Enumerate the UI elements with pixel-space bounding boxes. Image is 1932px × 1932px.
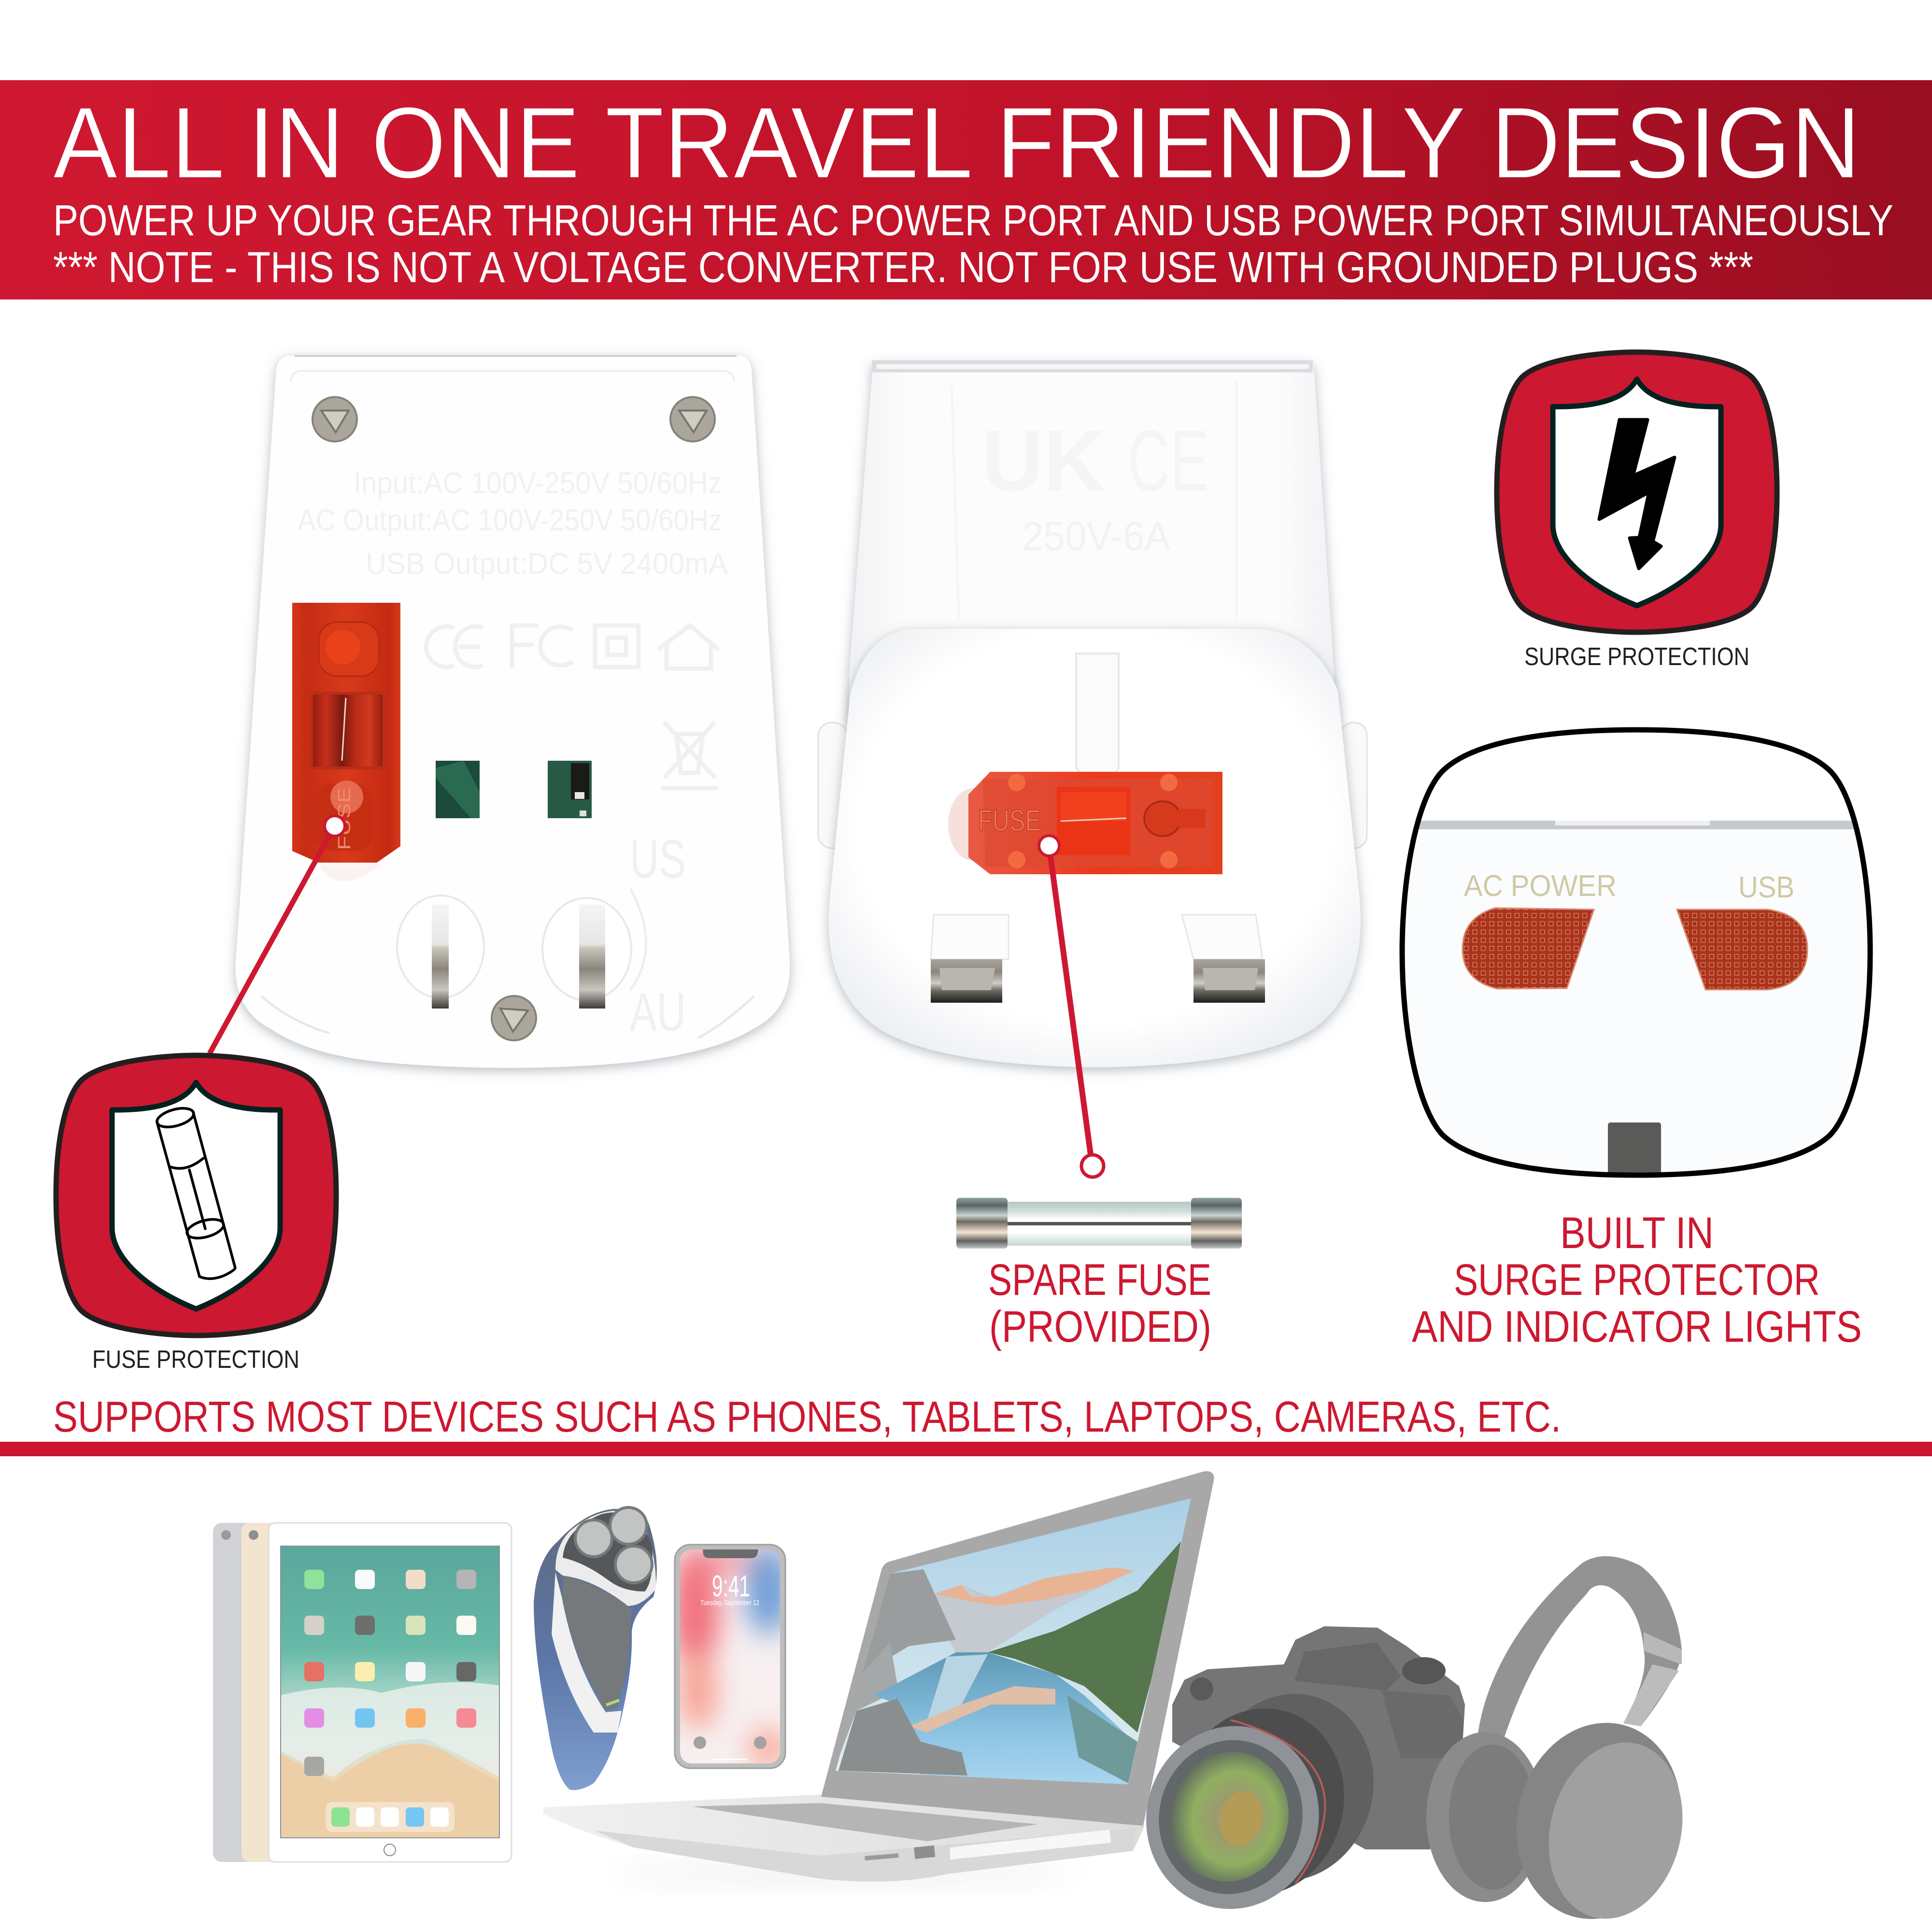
laptop base bbox=[543, 1794, 1145, 1882]
adapter body bbox=[236, 355, 790, 1068]
smartphone bbox=[671, 1543, 791, 1768]
laptop bbox=[543, 1471, 1214, 1885]
front ear cup bbox=[1496, 1705, 1702, 1932]
badge: surge protection bbox=[1497, 352, 1777, 632]
spare fuse caption bbox=[988, 1255, 1211, 1351]
earth tab slot bbox=[1608, 1122, 1661, 1176]
phone date: Tuesday, September 12 bbox=[700, 1599, 759, 1607]
surge protector caption: BUILT IN bbox=[1560, 1208, 1714, 1258]
fuse protection caption: FUSE PROTECTION bbox=[92, 1346, 299, 1374]
laptop screen scene bbox=[821, 1492, 1208, 1792]
surge protector caption bbox=[1412, 1208, 1862, 1351]
centre earth tab bbox=[1076, 653, 1119, 774]
embossed ratings text: Input:AC 100V-250V 50/60Hz bbox=[354, 467, 722, 500]
drawer pull red line bbox=[210, 826, 335, 1053]
surge protection caption: SURGE PROTECTION bbox=[1524, 643, 1749, 671]
embossed certification marks bbox=[426, 625, 719, 788]
embossed UK CE: CE bbox=[1128, 412, 1209, 510]
spare fuse illustration bbox=[956, 1198, 1242, 1249]
close-up photo contents bbox=[1401, 821, 1874, 1177]
DSLR camera bbox=[1127, 1626, 1465, 1932]
rear ear cup bbox=[1426, 1732, 1544, 1902]
tablet devices bbox=[213, 1523, 511, 1862]
supported devices heading: SUPPORTS MOST DEVICES SUCH AS PHONES, TABLETS, LAPTOPS, CAMERAS, ETC. bbox=[53, 1393, 1561, 1441]
US plug pins bbox=[397, 895, 631, 1009]
title: ALL IN ONE TRAVEL FRIENDLY DESIGN bbox=[53, 86, 1861, 199]
callout dot on front fuse bbox=[1039, 836, 1059, 856]
tablet screen bbox=[281, 1546, 499, 1838]
header banner bbox=[0, 80, 1932, 299]
laptop shadow bbox=[613, 1863, 1077, 1885]
phone wallpaper bbox=[671, 1543, 791, 1768]
embossed UK CE: 250V-6A bbox=[1022, 513, 1170, 559]
laptop keyboard bbox=[692, 1803, 1037, 1841]
headphones bbox=[1426, 1556, 1702, 1932]
embossed ratings text: USB Output:DC 5V 2400mA bbox=[366, 547, 728, 581]
plug head bbox=[829, 629, 1361, 1067]
right LED indicator bbox=[1677, 909, 1807, 990]
fuse opening shade bbox=[948, 788, 998, 861]
badge: fuse protection bbox=[56, 1055, 336, 1335]
phone clock: 9:41 bbox=[712, 1570, 750, 1603]
US and AU marks: AU bbox=[630, 982, 686, 1042]
spare fuse caption: (PROVIDED) bbox=[989, 1302, 1211, 1351]
US and AU marks: US bbox=[630, 829, 686, 889]
headband bbox=[1477, 1556, 1682, 1744]
red divider bar bbox=[0, 1442, 1932, 1456]
embossed UK CE bbox=[982, 412, 1209, 559]
tablet app icons bbox=[304, 1570, 476, 1832]
AC POWER label: AC POWER bbox=[1464, 869, 1617, 903]
embossed ratings text bbox=[298, 467, 728, 581]
electric shaver bbox=[534, 1507, 657, 1790]
upper body bbox=[849, 362, 1334, 724]
embossed ratings text: AC Output:AC 100V-250V 50/60Hz bbox=[298, 504, 722, 537]
callout dot on back fuse bbox=[325, 816, 345, 836]
FUSE marking: FUSE bbox=[978, 804, 1041, 838]
left LED indicator bbox=[1463, 908, 1594, 989]
camera lens bbox=[1127, 1663, 1393, 1932]
USB label: USB bbox=[1738, 871, 1794, 904]
indicator lights close-up bbox=[1401, 730, 1874, 1177]
adapter back view with US plug bbox=[210, 355, 790, 1068]
fuse drawer window bbox=[292, 603, 400, 881]
close-up frame bbox=[1402, 730, 1870, 1175]
icon: lightning bolt bbox=[1599, 420, 1675, 568]
spare fuse caption: SPARE FUSE bbox=[988, 1255, 1211, 1305]
fuse drawer window bbox=[968, 772, 1222, 874]
surge protector caption: AND INDICATOR LIGHTS bbox=[1412, 1302, 1862, 1351]
side buttons bbox=[818, 723, 1367, 848]
adapter front view with UK plug bbox=[818, 360, 1367, 1177]
callout line to spare fuse bbox=[1049, 846, 1091, 1154]
laptop ports strip bbox=[950, 1830, 1111, 1860]
UK pins bbox=[931, 915, 1265, 1003]
icon: fuse bbox=[155, 1105, 235, 1279]
lens red ring bbox=[1231, 1720, 1325, 1883]
US and AU marks bbox=[630, 829, 686, 1042]
socket openings bbox=[436, 761, 592, 818]
callout end ring bbox=[1081, 1155, 1104, 1177]
surge protector caption: SURGE PROTECTOR bbox=[1454, 1255, 1820, 1305]
FUSE drawer marking: FUSE bbox=[334, 787, 354, 850]
embossed UK CE: UK bbox=[982, 412, 1105, 510]
laptop lid bbox=[821, 1471, 1214, 1826]
screws bbox=[313, 397, 715, 1040]
